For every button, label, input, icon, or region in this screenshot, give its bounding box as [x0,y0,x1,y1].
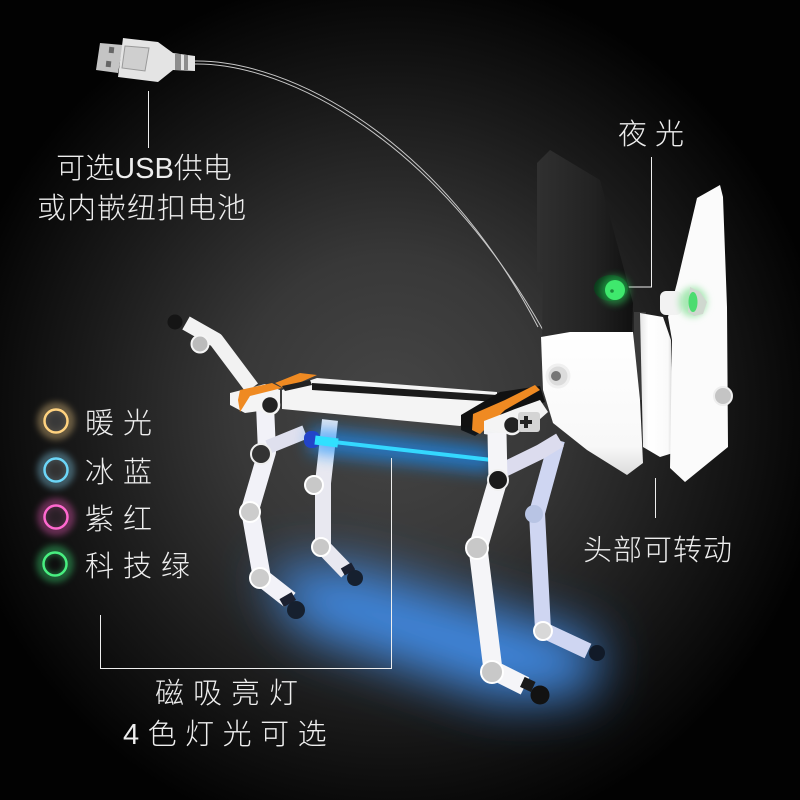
callout: USB leader line [148,91,150,148]
robot dog [168,150,732,704]
far rear leg [305,420,363,586]
callout: glow in the dark label [618,118,692,287]
USB cable [195,61,543,330]
far front leg [503,440,605,661]
near front leg [466,433,550,704]
heading: magnetic light text: 磁吸亮灯 [155,677,307,710]
tail [168,314,252,388]
body bar [230,373,548,436]
legend: light colours [41,407,199,583]
legend item: warm [42,407,161,440]
heading: magnetic light text [123,677,335,751]
icon: green glowing eye [594,275,630,305]
heading: magnetic light text: 4色灯光可选 [123,718,335,751]
legend item: tech green: 科技绿 [85,550,199,583]
legend item: magenta [42,503,161,536]
head: white face [541,332,643,475]
legend item: magenta: 紫红 [85,503,161,536]
callout: magnetic light leader [100,458,392,668]
heading: USB power text: 或内嵌纽扣电池 [37,192,247,225]
head: center column [634,312,673,457]
heading: USB power text [37,152,247,225]
callout: glow in the dark label: 夜光 [618,118,692,151]
icon: USB plug [96,38,195,82]
legend item: warm: 暖光 [85,407,161,440]
callout: head rotates: 头部可转动 [583,534,733,567]
heading: USB power text: 可选USB供电 [56,152,232,185]
legend item: ice blue [42,456,161,489]
near rear leg [240,405,305,619]
floor glow: blue light on ground [262,565,600,700]
legend item: ice blue: 冰蓝 [85,456,161,489]
legend item: tech green [41,550,199,583]
head: right ear [660,185,732,482]
head: dark fin [537,150,633,337]
light beam [304,431,492,460]
